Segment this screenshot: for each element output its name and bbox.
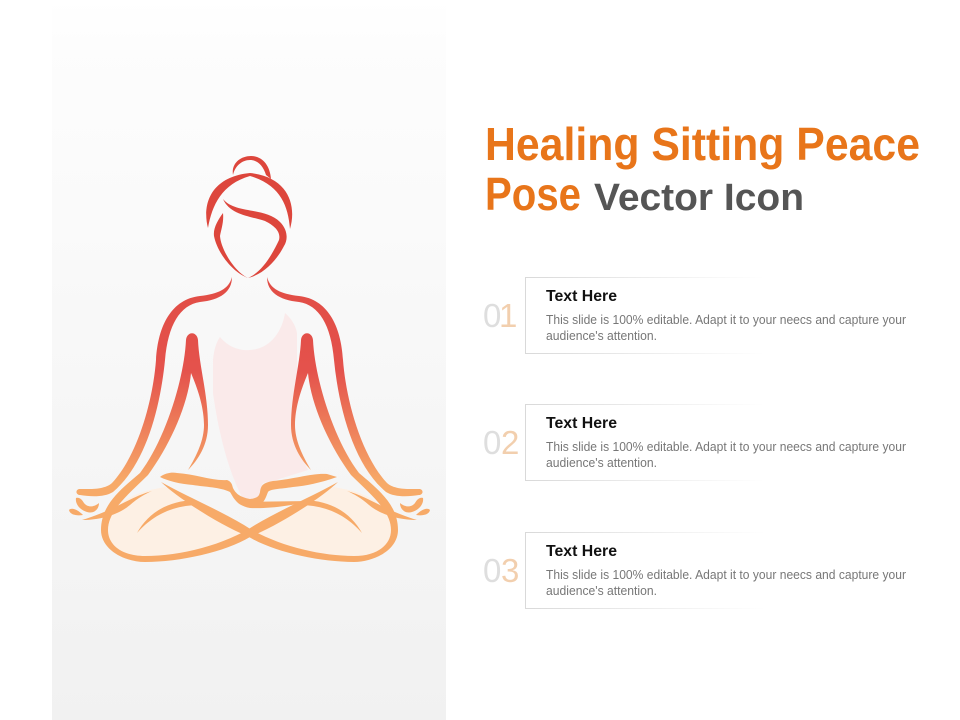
left leg fill [108,487,250,556]
right arm outer [267,277,423,496]
title: Pose [485,168,581,220]
lower belly band [237,501,310,508]
left hand [76,498,99,513]
right inner leg [299,500,362,533]
item heading: Text Here [546,543,617,560]
title: Vector Icon [594,177,804,219]
item text [546,312,907,343]
item 01 [483,277,907,354]
item text: audience's attention. [546,455,657,470]
box outline [524,532,526,608]
left arm outer [76,277,232,496]
left inner leg [137,500,200,533]
item 03 [483,532,907,609]
left inner arm and leg [101,333,338,562]
item text: audience's attention. [546,583,657,598]
icon: meditating figure [69,156,430,562]
fringe and right face [223,199,287,278]
item text: This slide is 100% editable. Adapt it to your neecs and capture your [546,567,907,582]
number 01: 1 [499,297,517,334]
box outline [524,278,526,354]
number 02: 2 [501,424,519,461]
panel: grey background [52,0,446,720]
hair outline [206,173,292,229]
right inner arm and leg [161,333,398,562]
item heading: Text Here [546,288,617,305]
number 02: 0 [483,424,501,461]
item text [546,567,907,598]
torso fill [213,313,308,499]
left thigh taper [82,491,152,520]
item text [546,439,907,470]
hair bun [233,156,271,179]
right thigh taper [347,491,417,520]
right hand [400,498,423,513]
number 03: 0 [483,552,501,589]
number 03: 3 [501,552,519,589]
left face [214,213,248,278]
number 01: 0 [483,297,501,334]
item text: audience's attention. [546,328,657,343]
right finger [416,509,430,515]
item text: This slide is 100% editable. Adapt it to your neecs and capture your [546,439,907,454]
left finger [69,509,83,515]
item 02 [483,404,907,481]
box outline [524,404,526,480]
belly band [160,473,337,502]
item text: This slide is 100% editable. Adapt it to your neecs and capture your [546,312,907,327]
title: Healing Sitting Peace [485,118,920,170]
item heading: Text Here [546,415,617,432]
right leg fill [249,487,391,556]
title [485,118,920,220]
